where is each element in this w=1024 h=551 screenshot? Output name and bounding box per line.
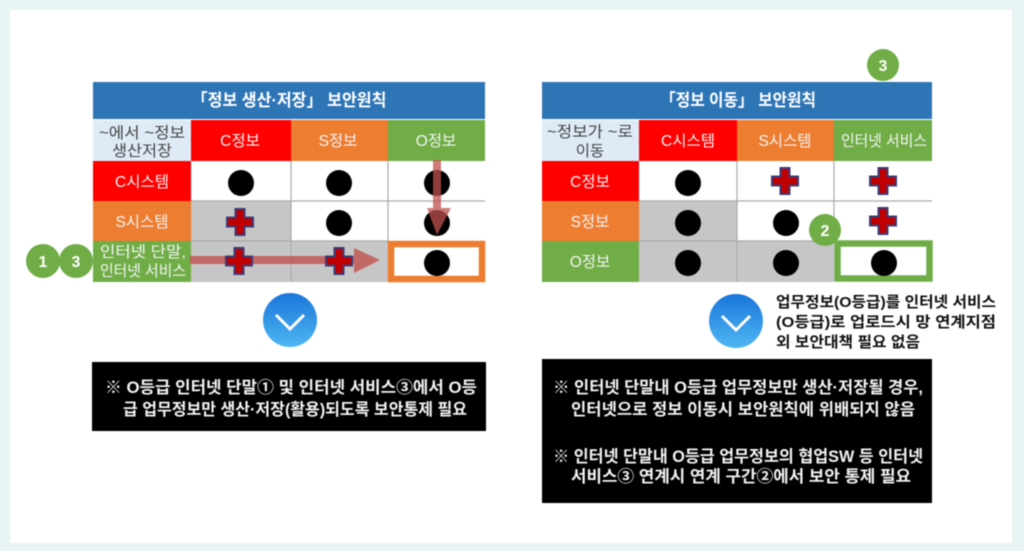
heading: right table title: 「정보 이동」 보안원칙 [660,91,816,110]
badge: 3 [867,49,899,81]
row headers: S정보 [571,213,609,231]
column header row [542,120,932,161]
heading: left table title: 「정보 생산·저장」 보안원칙 [192,91,386,110]
column header row: S시스템 [758,132,812,150]
matrix cell shading [191,161,485,282]
column header row [93,120,485,161]
arrow: horizontal [190,248,380,273]
badge: 1: 1 [39,254,48,271]
badge: 3 [59,244,93,278]
arrow: vertical [427,160,451,235]
callout: right black note: ※ 인터넷 단말내 O등급 업무정보의 협업SW 등 인터넷 [553,447,923,466]
column header row: 이동 [576,142,604,160]
row headers [542,161,639,282]
text block: upload note: 외 보안대책 필요 없음 [776,334,920,351]
column header row: C시스템 [661,132,715,150]
callout: right black note [542,359,932,503]
column header row: ~에서 ~정보 [99,124,185,142]
callout: right black note: 인터넷으로 정보 이동시 보안원칙에 위배되지 않음 [571,400,915,419]
column header row: S정보 [319,132,357,150]
badge: 3: 3 [72,254,81,271]
highlighted cell: internet service [838,244,930,278]
badge: 3: 3 [879,58,888,75]
column header row: 인터넷 서비스 [841,132,927,150]
matrix marks [226,170,450,274]
column header row: C정보 [220,132,260,150]
callout: right black note: ※ 인터넷 단말내 O등급 업무정보만 생산·저장될 경우, [553,378,923,397]
callout: left black note: ※ O등급 인터넷 단말① 및 인터넷 서비스③에서 O등 [105,378,477,397]
row headers: C정보 [570,173,610,191]
row headers: C시스템 [115,173,169,191]
row headers [93,161,191,282]
heading: left table title [93,82,485,119]
heading: right table title [542,82,932,119]
row headers: O정보 [570,253,610,271]
column header row: ~정보가 ~로 [547,123,633,141]
highlighted cell: O grade [391,244,482,279]
callout: left black note: 급 업무정보만 생산·저장(활용)되도록 보안통제 필요 [123,400,467,419]
column header row: O정보 [416,132,456,150]
icon: left chevron circle [263,293,317,347]
row headers: S시스템 [115,213,169,231]
row headers: 인터넷 서비스 [100,262,186,280]
icon: right chevron circle [709,294,763,348]
panel: information movement table [542,49,932,282]
badge: 1 [26,244,60,278]
callout: left black note [92,362,486,431]
badge: 2 [809,214,841,246]
text block: upload note [776,294,996,351]
text block: upload note: (O등급)로 업로드시 망 연계지점 [776,314,996,331]
callout: right black note: 서비스③ 연계시 연계 구간②에서 보안 통제 필요 [571,467,911,486]
row headers: 인터넷 단말, [100,243,186,261]
matrix cells [639,161,932,282]
column header row: 생산저장 [112,142,172,160]
panel: information production and storage table [26,82,485,282]
text block: upload note: 업무정보(O등급)를 인터넷 서비스 [776,294,996,311]
badge: 2: 2 [821,223,830,240]
